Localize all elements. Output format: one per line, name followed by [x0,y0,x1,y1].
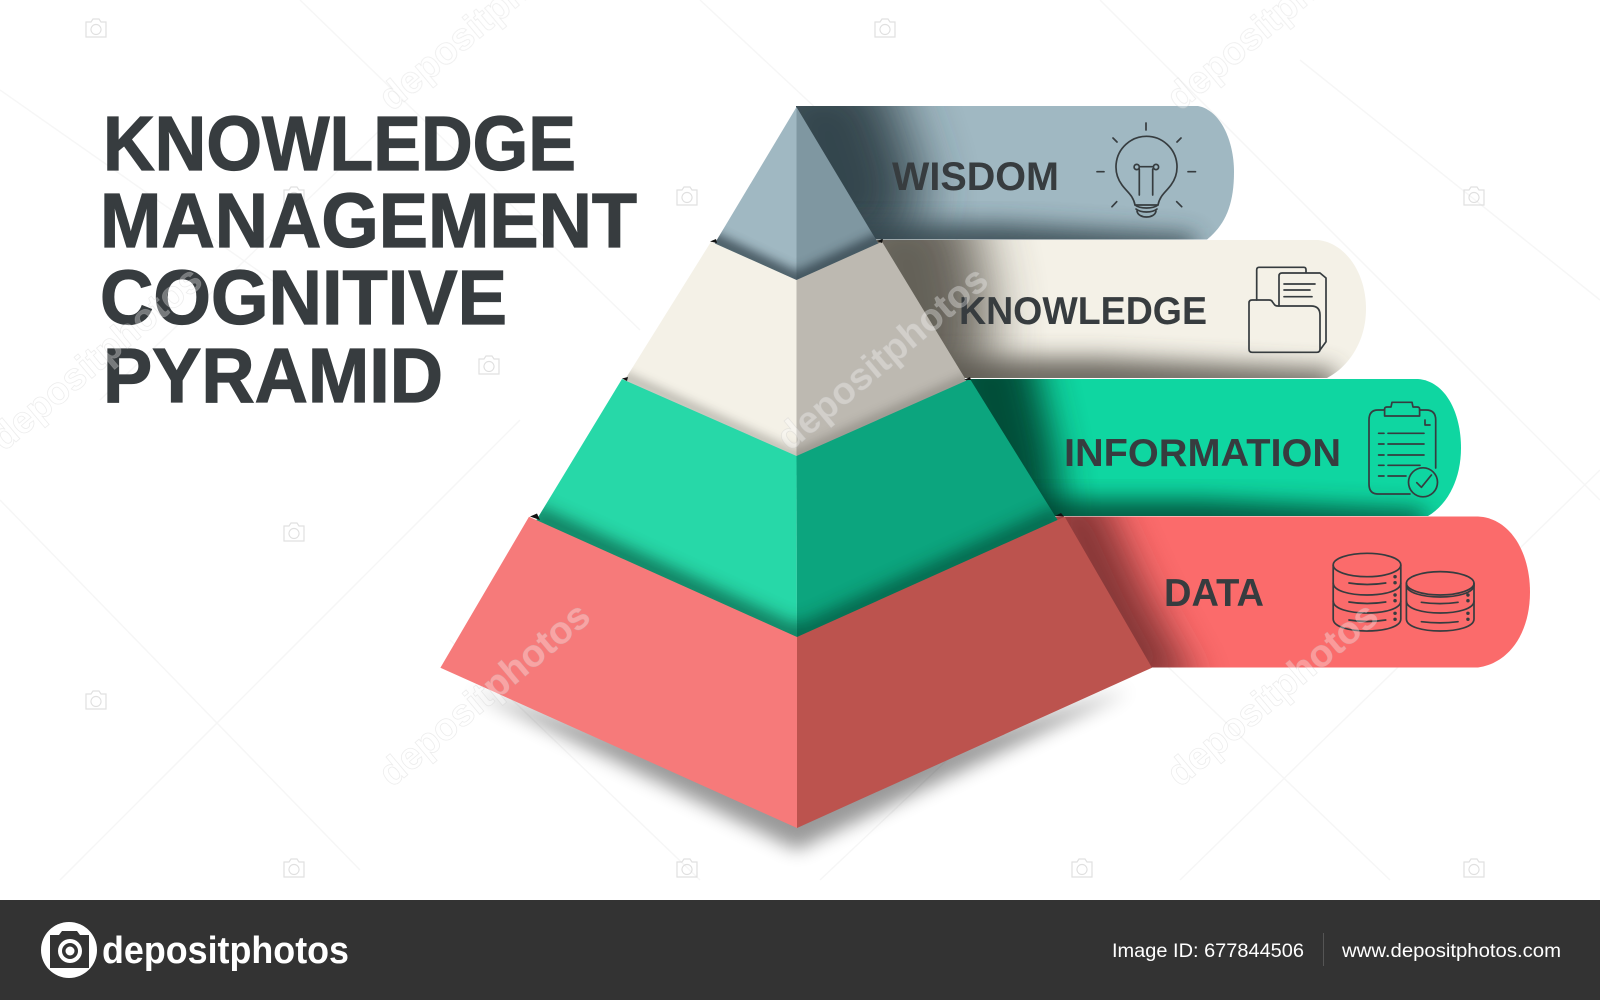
icon: clipboard with check [1369,402,1438,497]
band: information [930,340,1461,540]
label: wisdom: WISDOM [892,155,1059,199]
watermark: depositphotos text marks: depositphotos [371,594,598,795]
pyramid tier: information [530,377,1064,650]
band: knowledge [820,190,1366,400]
title: MANAGEMENT [100,178,637,264]
pyramid tier: wisdom [714,107,878,280]
title: KNOWLEDGE [103,101,576,187]
pyramid tier: knowledge [620,239,970,465]
title: COGNITIVE [100,255,507,341]
logo: camera mark [41,922,97,978]
label: data: DATA [1164,572,1264,615]
watermark: depositphotos text marks [0,0,1386,795]
icon: database stacks [1333,553,1474,631]
footer separator [1323,933,1324,966]
icon: light bulb [1097,123,1196,217]
title: PYRAMID [103,333,443,419]
footer bar [0,900,1600,1000]
logo: wordmark: depositphotos [102,930,349,972]
watermark: depositphotos text marks: depositphotos [1159,594,1386,795]
image id: Image ID: 677844506 [1112,940,1304,962]
icon: folder with documents [1249,267,1326,352]
pyramid tier: data [440,513,1152,828]
website url: www.depositphotos.com [1341,940,1561,962]
label: information: INFORMATION [1064,432,1341,475]
background camera watermarks [86,19,1484,877]
band: wisdom [796,106,1234,240]
watermark: depositphotos text marks: depositphotos [769,258,996,459]
label: knowledge: KNOWLEDGE [959,290,1207,333]
band: data [1030,490,1530,690]
pyramid drop shadow [470,690,1130,850]
title [100,101,637,419]
